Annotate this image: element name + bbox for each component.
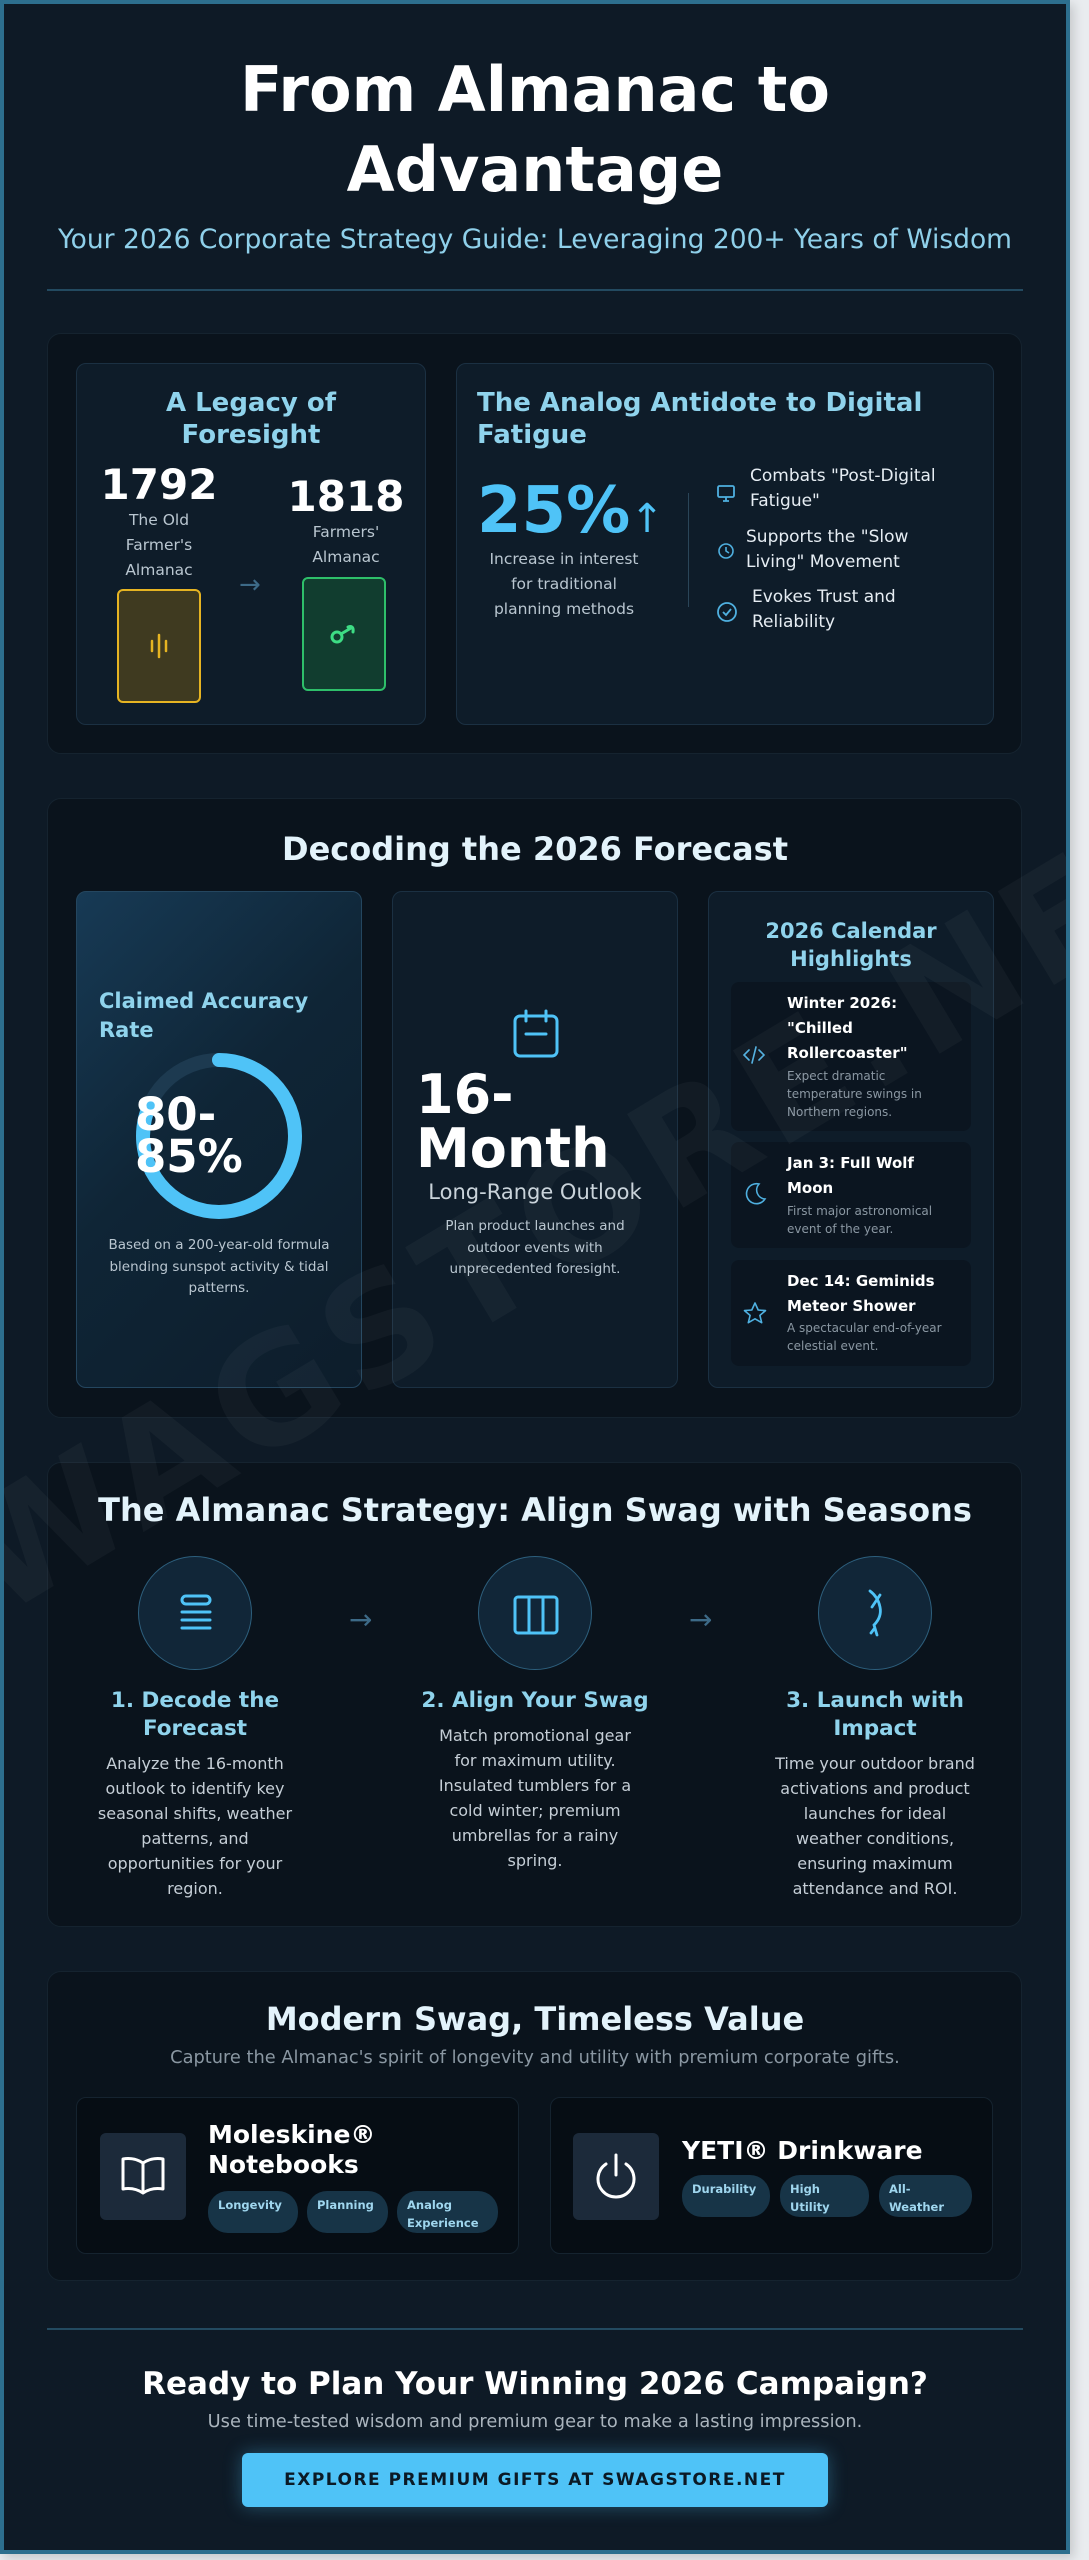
item: geminids [731, 1260, 971, 1366]
bullet: trust: Reliability [752, 612, 835, 632]
bullet: slow living: Living" Movement [746, 552, 900, 572]
step 3: 3. Launch with [786, 1688, 964, 1713]
stat: 1818: 1818 [288, 472, 404, 521]
step 1: Forecast [143, 1716, 247, 1741]
bullet: slow living: Supports the "Slow [746, 527, 908, 547]
icon: step 3 [818, 1556, 932, 1670]
bullet: post-digital [717, 466, 936, 511]
item: geminids: A spectacular end-of-year celestial event. [787, 1321, 942, 1353]
chart: accuracy ring [136, 1053, 302, 1219]
heading: accuracy: Claimed Accuracy [99, 989, 308, 1013]
heading: analog [477, 388, 922, 450]
item: wolf moon: Jan 3: Full Wolf Moon [787, 1154, 914, 1197]
panel: strategy [47, 1462, 1022, 1927]
subtitle: Your 2026 Corporate Strategy Guide: Leveraging 200+ Years of Wisdom [58, 224, 1012, 255]
heading: legacy: Foresight [182, 420, 320, 450]
card: moleskine [76, 2097, 519, 2254]
heading: analog: The Analog Antidote to Digital [477, 388, 922, 418]
title: From Almanac to [240, 53, 830, 126]
card: moleskine: Moleskine® [208, 2120, 375, 2149]
caption: accuracy: Based on a 200-year-old formula blending sunspot activity & tidal patterns. [108, 1237, 330, 1296]
stat: 16-month [416, 1063, 610, 1180]
bullet: trust: Evokes Trust and [752, 587, 896, 607]
card: 16-month [392, 891, 678, 1388]
step 2: Match promotional gear for maximum utility. Insulated tumblers for a cold winter; premium umbrellas for a rainy spring. [439, 1726, 631, 1870]
stat: 16-month: Month [416, 1117, 610, 1180]
card: calendar highlights [708, 891, 994, 1388]
bullet: post-digital: Fatigue" [750, 491, 820, 511]
stat: 1818: Farmers' [313, 523, 379, 541]
step 3: Impact [833, 1716, 917, 1741]
icon: green almanac book [302, 577, 386, 691]
card: analog antidote [456, 363, 994, 725]
panel: decoding forecast [47, 798, 1022, 1418]
item: winter [731, 982, 971, 1131]
card: yeti: Utility [790, 2200, 830, 2214]
card: yeti: Durability [692, 2182, 756, 2196]
cta button: EXPLORE PREMIUM GIFTS AT SWAGSTORE.NET [284, 2470, 786, 2490]
step 1 [98, 1556, 292, 1898]
stat: 1792: 1792 [101, 460, 217, 509]
card: moleskine: Notebooks [208, 2150, 359, 2179]
caption: 25%: Increase in interest for traditional planning methods [489, 550, 639, 618]
stat: 1792: Farmer's [126, 536, 192, 554]
card: moleskine: Planning [317, 2198, 374, 2212]
heading: calendar: 2026 Calendar [765, 919, 937, 943]
cta subtitle: Use time-tested wisdom and premium gear to make a lasting impression. [208, 2411, 862, 2432]
card: moleskine: Experience [407, 2216, 479, 2230]
item: winter: Expect dramatic temperature swings in Northern regions. [787, 1069, 922, 1119]
step 3 [775, 1556, 975, 1898]
stat: 1818 [288, 472, 404, 566]
subtitle: modern swag: Capture the Almanac's spirit of longevity and utility with premium corporate gifts. [170, 2047, 900, 2068]
arrow 1: → [349, 1603, 372, 1636]
card: yeti [550, 2097, 993, 2254]
icon: yellow almanac book [117, 589, 201, 703]
step 2 [421, 1556, 649, 1870]
stat: 1792: The Old [129, 511, 189, 529]
card: yeti: Weather [889, 2200, 944, 2214]
icon: book [100, 2133, 186, 2220]
stat: 1818: Almanac [312, 548, 380, 566]
stat: 1792 [101, 460, 217, 579]
heading: accuracy [99, 989, 308, 1042]
card: yeti: All- [889, 2182, 911, 2196]
icon: step 1 [138, 1556, 252, 1670]
title: Advantage [347, 133, 723, 206]
card: yeti: High [790, 2182, 820, 2196]
heading: analog: Fatigue [477, 420, 587, 450]
icon: step 2 [478, 1556, 592, 1670]
cta button [242, 2453, 828, 2507]
bullet: slow living [718, 527, 908, 572]
card: yeti: YETI® Drinkware [682, 2136, 923, 2165]
bullet: post-digital: Combats "Post-Digital [750, 466, 936, 486]
title [240, 53, 830, 206]
bullet list [717, 466, 936, 632]
icon: power [573, 2133, 659, 2220]
heading: legacy [166, 388, 336, 450]
heading: calendar: Highlights [790, 947, 912, 971]
heading: decoding: Decoding the 2026 Forecast [282, 830, 788, 868]
arrow 2: → [689, 1603, 712, 1636]
step 2: 2. Align Your Swag [421, 1688, 649, 1713]
arrow: → [239, 570, 261, 600]
stat: 16-month: 16- [416, 1063, 514, 1126]
heading: modern swag: Modern Swag, Timeless Value [266, 2000, 804, 2038]
heading: strategy: The Almanac Strategy: Align Swag with Seasons [98, 1491, 972, 1529]
stat: 80-85%: 85% [135, 1130, 243, 1183]
step 1: Analyze the 16-month outlook to identify key seasonal shifts, weather patterns, and opportunities for your region. [98, 1754, 292, 1898]
heading: legacy: A Legacy of [166, 388, 336, 418]
card: accuracy [76, 891, 362, 1388]
heading: accuracy: Rate [99, 1018, 154, 1042]
panel: legacy and analog [47, 333, 1022, 754]
item: geminids: Dec 14: Geminids Meteor Shower [787, 1272, 935, 1315]
stat: 80-85%: 80- [135, 1088, 216, 1141]
cta heading: Ready to Plan Your Winning 2026 Campaign? [142, 2366, 928, 2402]
card: moleskine: Analog [407, 2198, 452, 2212]
item: winter: Winter 2026: "Chilled Rollercoaster" [787, 994, 908, 1062]
text: long-range: Long-Range Outlook [428, 1180, 642, 1204]
step 1: 1. Decode the [111, 1688, 279, 1713]
card: moleskine: Longevity [218, 2198, 282, 2212]
icon: calendar [514, 1010, 558, 1058]
stat: 1792: Almanac [125, 561, 193, 579]
item: wolf moon [731, 1142, 971, 1248]
panel: modern swag [47, 1971, 1022, 2281]
heading: calendar [765, 919, 937, 971]
step 3: Time your outdoor brand activations and product launches for ideal weather conditions, ensuring maximum attendance and ROI. [775, 1754, 975, 1898]
text: 16-month desc: Plan product launches and outdoor events with unprecedented foresight. [445, 1218, 625, 1277]
item: wolf moon: First major astronomical event of the year. [787, 1204, 932, 1236]
bullet: trust [717, 587, 896, 632]
card: legacy of foresight [76, 363, 426, 725]
stat: 80-85% [135, 1088, 243, 1183]
stat: 25%: 25%↑ [477, 474, 664, 548]
